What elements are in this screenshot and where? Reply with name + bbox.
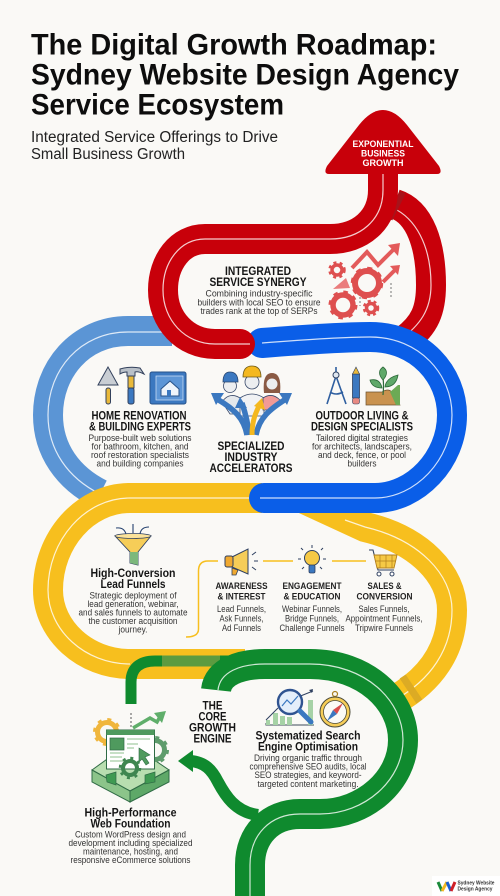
panel: outdoor living: DESIGN SPECIALISTS [311,422,413,434]
column: sales and conversion [346,581,422,633]
panel: search engine optimisation: Driving organic traffic through [254,753,362,763]
subtitle: Integrated Service Offerings to Drive [31,129,278,146]
column: awareness and interest: Lead Funnels, [217,604,266,614]
title: Service Ecosystem [31,88,284,122]
panel: outdoor living [311,410,413,468]
icon: megaphone [225,549,258,575]
panel: integrated service synergy: Combining industry-specific [206,288,313,298]
column: awareness and interest: & INTEREST [218,592,266,602]
panel: integrated service synergy: INTEGRATED [225,266,291,278]
logo: Sydney Website Design Agency [432,876,500,896]
title: The Digital Growth Roadmap: [31,28,437,62]
road: yellow tail segment [300,497,452,700]
icon: compass dial [320,692,350,727]
arrow label: EXPONENTIAL [352,139,414,149]
panel: web foundation: High-Performance [84,808,176,820]
road: red main segment [163,170,383,344]
column: sales and conversion: Sales Funnels, [358,604,410,614]
column: sales and conversion: CONVERSION [356,592,412,602]
column: engagement and education: Webinar Funnels, [282,604,342,614]
icon: trowel, hammer, blueprint [98,367,186,404]
arrow label: BUSINESS [361,148,405,158]
column: awareness and interest: Ask Funnels, [220,614,264,624]
arrow label [352,139,414,168]
panel: high-conversion lead funnels: lead generation, webinar, [88,599,178,609]
label: the core growth engine: THE [202,700,223,712]
title: Sydney Website Design Agency [31,58,460,92]
panel: outdoor living: OUTDOOR LIVING & [316,410,408,422]
panel: search engine optimisation: targeted content marketing. [258,779,358,789]
arrow label: GROWTH [362,158,404,168]
panel: integrated service synergy [198,266,321,316]
column: engagement and education: & EDUCATION [284,592,340,602]
panel: specialized industry accelerators [210,439,292,475]
panel: search engine optimisation: comprehensive SEO audits, local [250,762,367,772]
panel: integrated service synergy: builders with local SEO to ensure [198,298,321,308]
panel: specialized industry accelerators: SPECIALIZED [218,439,285,453]
icon: shopping cart [369,550,397,576]
panel: high-conversion lead funnels: journey. [118,624,148,634]
panel: home renovation: roof restoration specialists [91,450,190,460]
panel: web foundation: maintenance, hosting, and [83,846,178,856]
column: engagement and education: ENGAGEMENT [282,581,342,591]
label: the core growth engine [189,700,236,746]
panel: web foundation: Custom WordPress design and [75,830,186,840]
road: small green connector [131,661,235,704]
panel: high-conversion lead funnels: the customer acquisition [88,616,178,626]
panel: high-conversion lead funnels: Lead Funnels [100,579,166,591]
panel: home renovation: & BUILDING EXPERTS [89,422,191,434]
column: awareness and interest: Ad Funnels [222,623,262,633]
panel: outdoor living: for architects, landscapers, [312,442,412,452]
panel: home renovation: Purpose-built web solutions [88,433,192,443]
panel: outdoor living: and deck, fence, or pool [318,450,406,460]
panel: web foundation: development including specialized [68,838,193,848]
icon: website on platform with gears [92,711,169,802]
subtitle: Small Business Growth [31,146,185,163]
panel: home renovation [88,410,192,468]
column: awareness and interest: AWARENESS [216,581,268,591]
column: engagement and education [280,581,345,633]
panel: search engine optimisation: SEO strategies, and keyword- [254,770,362,780]
panel: search engine optimisation [250,730,367,789]
panel: specialized industry accelerators: INDUSTRY [224,450,278,464]
green return arrow [178,750,258,815]
panel: search engine optimisation: Engine Optimisation [258,742,358,754]
icon: funnel [115,524,151,565]
panel: integrated service synergy: SERVICE SYNERGY [210,277,307,289]
column: engagement and education: Challenge Funnels [280,623,345,633]
column: sales and conversion: Appointment Funnels, [346,614,422,624]
red growth arrow head [325,110,441,174]
subtitle [31,129,278,163]
column: sales and conversion: SALES & [368,581,402,591]
panel: integrated service synergy: trades rank at the top of SERPs [200,306,318,316]
label: the core growth engine: ENGINE [194,734,232,746]
road: yellow main segment [48,498,262,664]
panel: high-conversion lead funnels [78,568,188,634]
panel: high-conversion lead funnels: and sales funnels to automate [78,608,188,618]
panel: web foundation: responsive eCommerce solutions [70,855,191,865]
road: light blue segment [48,331,172,494]
icon: compass, pencil, plant [327,367,400,405]
panel: home renovation: HOME RENOVATION [92,410,186,422]
panel: specialized industry accelerators: ACCELERATORS [210,461,292,475]
icon: light bulb [298,545,326,573]
panel: home renovation: and building companies [96,458,184,468]
label: the core growth engine: CORE [198,712,227,724]
logo: Sydney Website Design Agency: Sydney Website [458,880,495,886]
column: awareness and interest [216,581,268,633]
panel: web foundation [68,808,193,865]
panel: outdoor living: builders [348,458,377,468]
column: engagement and education: Bridge Funnels, [285,614,339,624]
label: the core growth engine: GROWTH [189,722,236,734]
logo: Sydney Website Design Agency: Design Agency [458,886,493,892]
road: red tail segment [393,204,431,340]
column: sales and conversion: Tripwire Funnels [355,623,414,633]
panel: home renovation: for bathroom, kitchen, and [92,442,189,452]
panel: outdoor living: Tailored digital strategies [316,433,409,443]
panel: web foundation: Web Foundation [90,818,170,830]
icon: gears and growth arrows [330,243,400,318]
connector: funnel stage bracket [186,561,366,637]
icon: magnifier with chart [266,689,314,725]
road: green main segment [216,664,403,896]
icon: workers and diverging arrows [211,366,292,435]
panel: high-conversion lead funnels: Strategic deployment of [90,590,177,600]
title [31,28,460,122]
panel: search engine optimisation: Systematized Search [256,730,360,742]
panel: high-conversion lead funnels: High-Conversion [90,568,176,580]
road: blue segment [260,337,452,498]
